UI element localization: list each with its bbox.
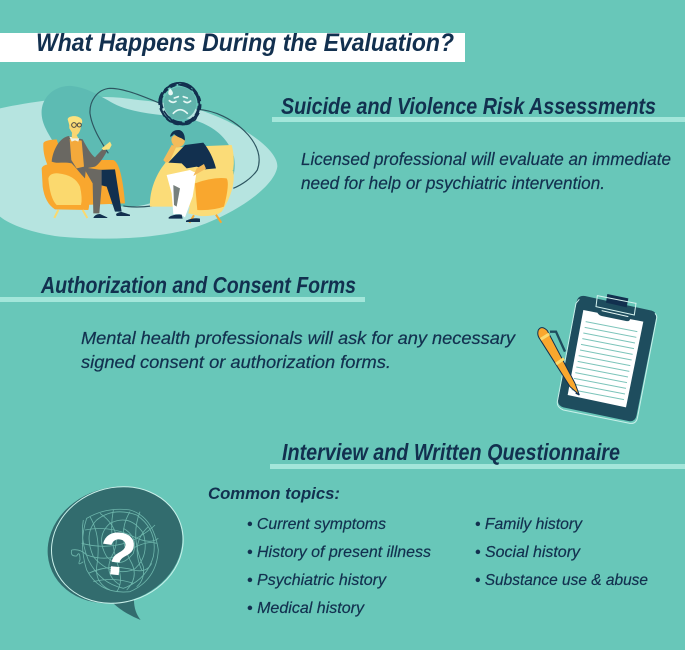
illustration: therapy session [0,76,277,239]
icon: worried face with scribble [152,76,207,130]
therapist figure [52,116,130,218]
icon: speech bubble with question mark: ? [96,518,140,590]
text block: consent forms: Mental health professionals will ask for any necessary [81,328,516,348]
topics list: right column: • Family history [475,516,583,533]
scribble [71,509,158,592]
topics list: left column: • Medical history [247,600,365,617]
text block: consent forms: signed consent or authorization forms. [81,352,391,372]
icon: clipboard and pen [538,294,657,423]
topics list: right column: • Social history [475,544,581,561]
text block: risk assessments: need for help or psychiatric intervention. [301,173,605,193]
topics list: right column [475,516,648,589]
heading: consent forms [0,272,365,302]
darker blob [42,86,235,207]
topics list: left column: • Current symptoms [247,516,386,533]
icon: speech bubble with question mark [32,469,198,621]
left armchair [42,139,125,218]
text block: common topics: Common topics: [208,484,340,503]
text block: risk assessments: Licensed professional will evaluate an immediate [301,149,671,169]
thin connecting line [90,88,259,207]
heading: interview and questionnaire: Interview and Written Questionnaire [282,439,620,465]
right armchair [150,145,234,223]
topics list: left column: • Psychiatric history [247,572,387,589]
topics list: left column: • History of present illness [247,544,431,561]
light background ellipse [0,97,277,239]
topics list: right column: • Substance use & abuse [475,572,648,589]
title: What Happens During the Evaluation? [36,29,454,57]
patient figure [163,130,216,222]
topics list: left column [247,516,431,617]
text block: risk assessments [301,149,671,193]
heading: consent forms: Authorization and Consent Forms [40,272,356,298]
text block: consent forms [81,328,516,372]
text block: common topics [208,484,648,617]
